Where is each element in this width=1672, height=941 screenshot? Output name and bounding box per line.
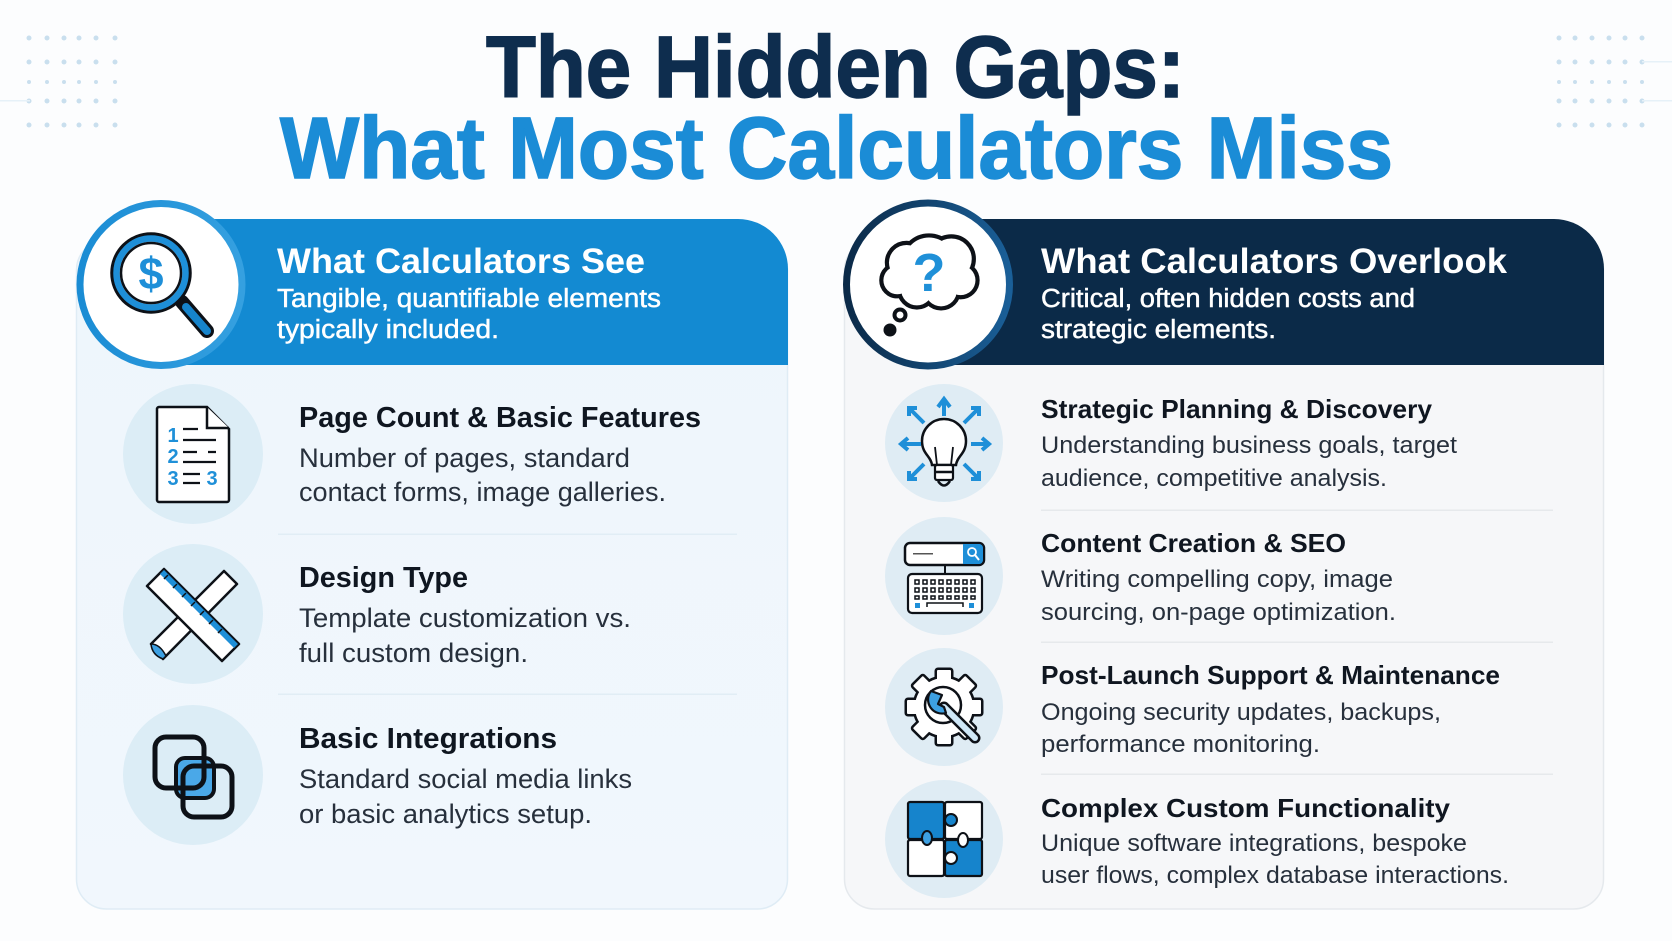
icon: numbered document: 3 (206, 468, 218, 490)
list item: design type: full custom design. (299, 638, 528, 668)
decorative dot grid: top left (0, 36, 118, 128)
list item: complex custom functionality (885, 780, 1509, 898)
list item: complex custom functionality: Unique software integrations, bespoke (1041, 830, 1467, 857)
panel header: what calculators overlook: What Calculators Overlook (1041, 242, 1508, 281)
decorative dot grid: top right (1556, 36, 1672, 128)
list item: strategic planning and discovery: Understanding business goals, target (1041, 432, 1457, 459)
list item: post-launch support and maintenance: Post-Launch Support & Maintenance (1041, 660, 1500, 690)
list item: basic integrations (123, 705, 632, 845)
icon: numbered document: 3 (167, 468, 179, 490)
list item: design type: Design Type (299, 562, 468, 594)
list item: strategic planning and discovery (885, 384, 1457, 502)
list item: content creation and seo: Writing compelling copy, image (1041, 566, 1393, 593)
icon: puzzle pieces (885, 780, 1003, 898)
panel: what calculators see (76, 204, 788, 909)
panel: what calculators overlook (844, 203, 1604, 909)
list item: page count and basic features: Page Count & Basic Features (299, 402, 701, 434)
panel header: what calculators overlook: Critical, often hidden costs and (1041, 285, 1415, 313)
panel header: what calculators overlook: strategic elements. (1041, 316, 1276, 344)
list item: complex custom functionality: user flows, complex database interactions. (1041, 862, 1509, 889)
list item: complex custom functionality: Complex Custom Functionality (1041, 793, 1451, 823)
panel header: what calculators see: typically included. (277, 316, 499, 344)
icon: gear with wrench (885, 648, 1003, 766)
title: What Most Calculators Miss (280, 100, 1393, 197)
panel header: what calculators overlook (928, 219, 1604, 365)
list item: content creation and seo: sourcing, on-page optimization. (1041, 599, 1396, 626)
list item: page count and basic features: contact forms, image galleries. (299, 477, 666, 507)
icon: magnifying glass with dollar (80, 204, 242, 366)
list item: post-launch support and maintenance: Ongoing security updates, backups, (1041, 699, 1441, 726)
list item: post-launch support and maintenance: performance monitoring. (1041, 731, 1320, 758)
list item: design type: Template customization vs. (299, 603, 631, 633)
icon: numbered document (123, 384, 263, 524)
icon: light bulb with arrows (885, 384, 1003, 502)
icon: search bar and keyboard (885, 517, 1003, 635)
icon: numbered document: 1 (167, 425, 179, 447)
icon: magnifying glass with dollar: $ (138, 248, 164, 299)
panel header: what calculators see (158, 219, 788, 365)
icon: crossed ruler and pencil (123, 544, 263, 684)
list item: basic integrations: Basic Integrations (299, 723, 557, 755)
icon: overlapping squares (123, 705, 263, 845)
list item: design type (123, 544, 631, 684)
title: The Hidden Gaps: (486, 19, 1185, 116)
list item: page count and basic features: Number of pages, standard (299, 443, 630, 473)
panel header: what calculators see: What Calculators See (277, 242, 645, 281)
list item: page count and basic features (123, 384, 701, 524)
title (280, 19, 1393, 197)
list item: content creation and seo: Content Creation & SEO (1041, 528, 1346, 558)
list item: strategic planning and discovery: audience, competitive analysis. (1041, 465, 1387, 492)
icon: thought cloud with question mark: ? (912, 243, 946, 303)
list item: basic integrations: or basic analytics setup. (299, 799, 592, 829)
list item: post-launch support and maintenance (885, 648, 1500, 766)
list item: content creation and seo (885, 517, 1396, 635)
icon: thought cloud with question mark (846, 203, 1010, 366)
icon: numbered document: 2 (167, 446, 179, 468)
list item: basic integrations: Standard social media links (299, 764, 632, 794)
list item: strategic planning and discovery: Strategic Planning & Discovery (1041, 394, 1433, 424)
panel header: what calculators see: Tangible, quantifiable elements (277, 285, 661, 313)
